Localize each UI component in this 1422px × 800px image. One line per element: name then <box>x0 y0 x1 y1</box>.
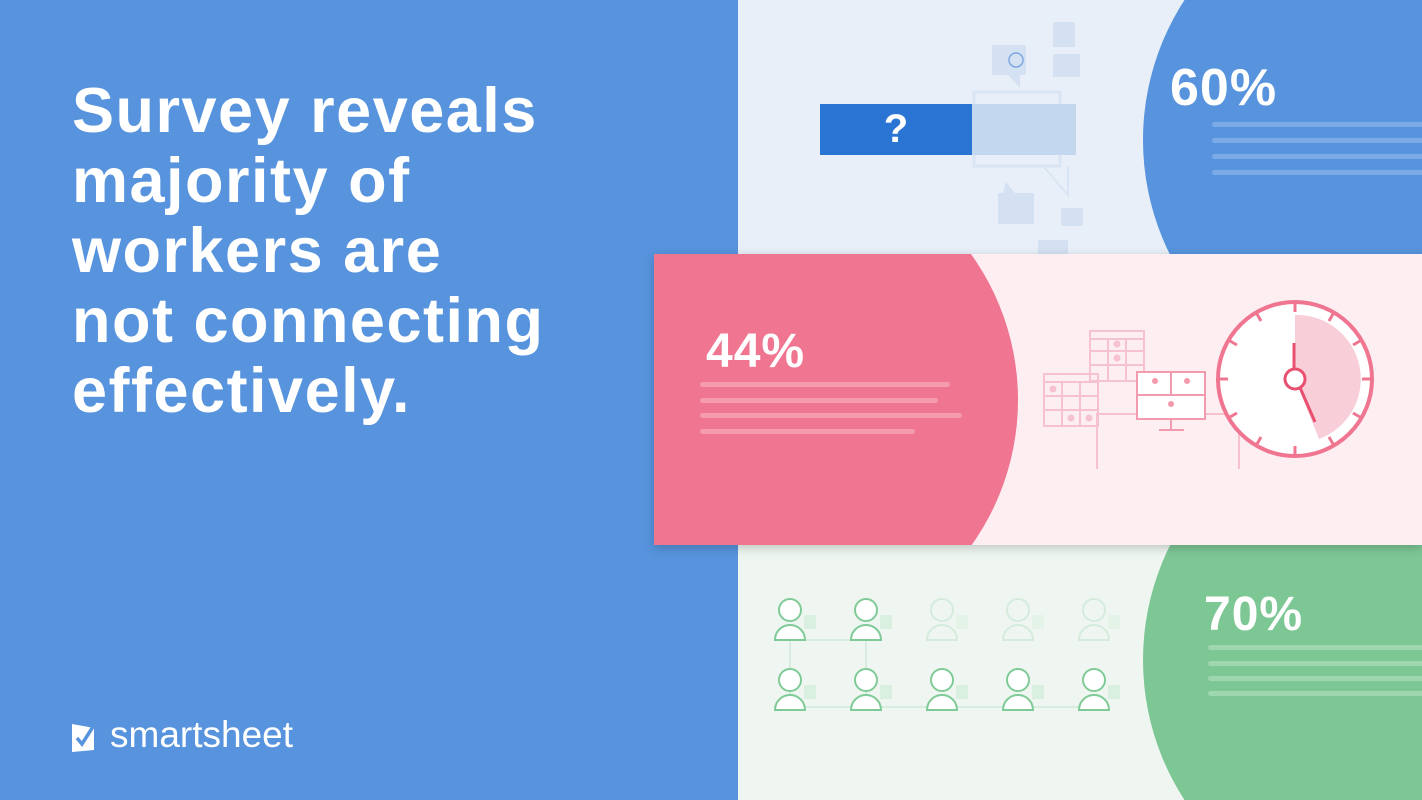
bar: question: ? <box>884 107 908 151</box>
stat: 44%: 44% <box>706 325 805 378</box>
title: majority of <box>72 146 411 216</box>
title: workers are <box>72 216 442 286</box>
circle: blue 60% <box>1143 0 1422 397</box>
bar: question <box>820 104 972 155</box>
title: Survey reveals <box>72 76 538 146</box>
title: not connecting <box>72 286 544 356</box>
logo: smartsheet: smartsheet <box>110 714 293 755</box>
icon: speech bubbles <box>972 22 1083 254</box>
panel: 70% bottom <box>738 545 1422 800</box>
panel: 44% middle <box>654 254 1422 545</box>
panel: left title panel <box>0 0 738 800</box>
icon: clock <box>1216 300 1374 458</box>
icon: desk, calendars, monitor <box>1043 330 1240 469</box>
stat: 70%: 70% <box>1204 588 1303 641</box>
icon: people network <box>774 598 1120 711</box>
title: effectively. <box>72 356 411 426</box>
circle: pink 44% <box>518 150 1018 650</box>
stat: 60%: 60% <box>1170 59 1277 117</box>
circle: green 70% <box>1143 403 1422 800</box>
panel: 60% top <box>738 0 1422 255</box>
title <box>72 76 544 426</box>
